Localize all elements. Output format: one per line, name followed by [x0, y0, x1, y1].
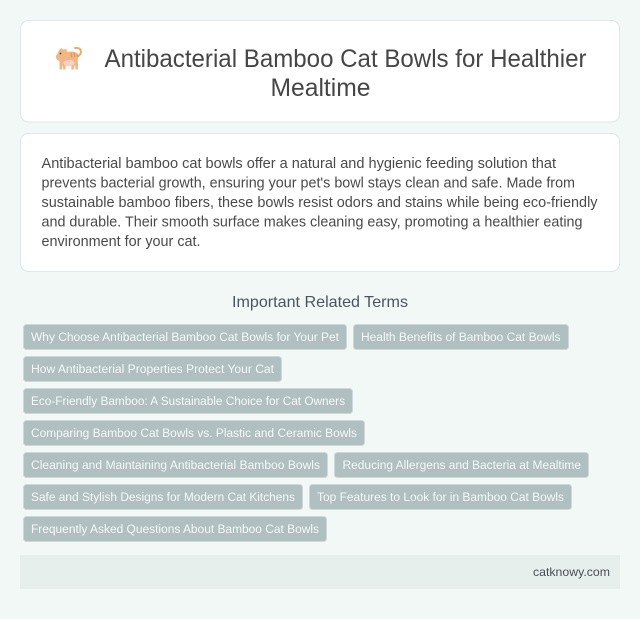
panel: related term tags [24, 324, 588, 542]
tag [354, 324, 568, 350]
heading: important related terms: Important Related Terms [232, 294, 408, 311]
icon: cat [56, 48, 81, 70]
tag: Frequently Asked Questions About Bamboo Cat Bowls [31, 522, 319, 536]
tag: How Antibacterial Properties Protect Your Cat [31, 362, 275, 376]
tag [24, 452, 328, 478]
tag [24, 420, 364, 446]
tag [24, 356, 282, 382]
text block: description: Antibacterial bamboo cat bowls offer a natural and hygienic feeding solution that [42, 156, 556, 172]
tag: Why Choose Antibacterial Bamboo Cat Bowls for Your Pet [31, 330, 340, 344]
tag [24, 516, 326, 542]
text block: description: sustainable bamboo fibers, these bowls resist odors and stains while being eco-friendly [42, 195, 598, 211]
title [104, 45, 586, 102]
footer [20, 555, 620, 589]
tag: Health Benefits of Bamboo Cat Bowls [361, 330, 560, 344]
text block: description: environment for your cat. [42, 234, 200, 250]
tag [24, 484, 302, 510]
tag: Comparing Bamboo Cat Bowls vs. Plastic and Ceramic Bowls [31, 426, 357, 440]
panel: title card [20, 20, 620, 122]
tag [310, 484, 572, 510]
tag: Safe and Stylish Designs for Modern Cat Kitchens [31, 490, 295, 504]
tag [24, 388, 352, 414]
tag: Reducing Allergens and Bacteria at Mealtime [342, 458, 581, 472]
tag [334, 452, 588, 478]
tag: Top Features to Look for in Bamboo Cat Bowls [317, 490, 564, 504]
text block: description: and durable. Their smooth surface makes cleaning easy, promoting a healthier eating [42, 214, 582, 230]
tag: Cleaning and Maintaining Antibacterial Bamboo Bowls [31, 458, 320, 472]
tag [24, 324, 346, 350]
panel: description [20, 134, 620, 272]
footer: catknowy.com [533, 565, 610, 579]
title: Antibacterial Bamboo Cat Bowls for Healthier [104, 45, 586, 73]
text block: description [42, 156, 598, 250]
text block: description: prevents bacterial growth, ensuring your pet's bowl stays clean and safe. Made from [42, 176, 575, 192]
title: Mealtime [270, 74, 370, 102]
tag: Eco-Friendly Bamboo: A Sustainable Choice for Cat Owners [31, 394, 345, 408]
